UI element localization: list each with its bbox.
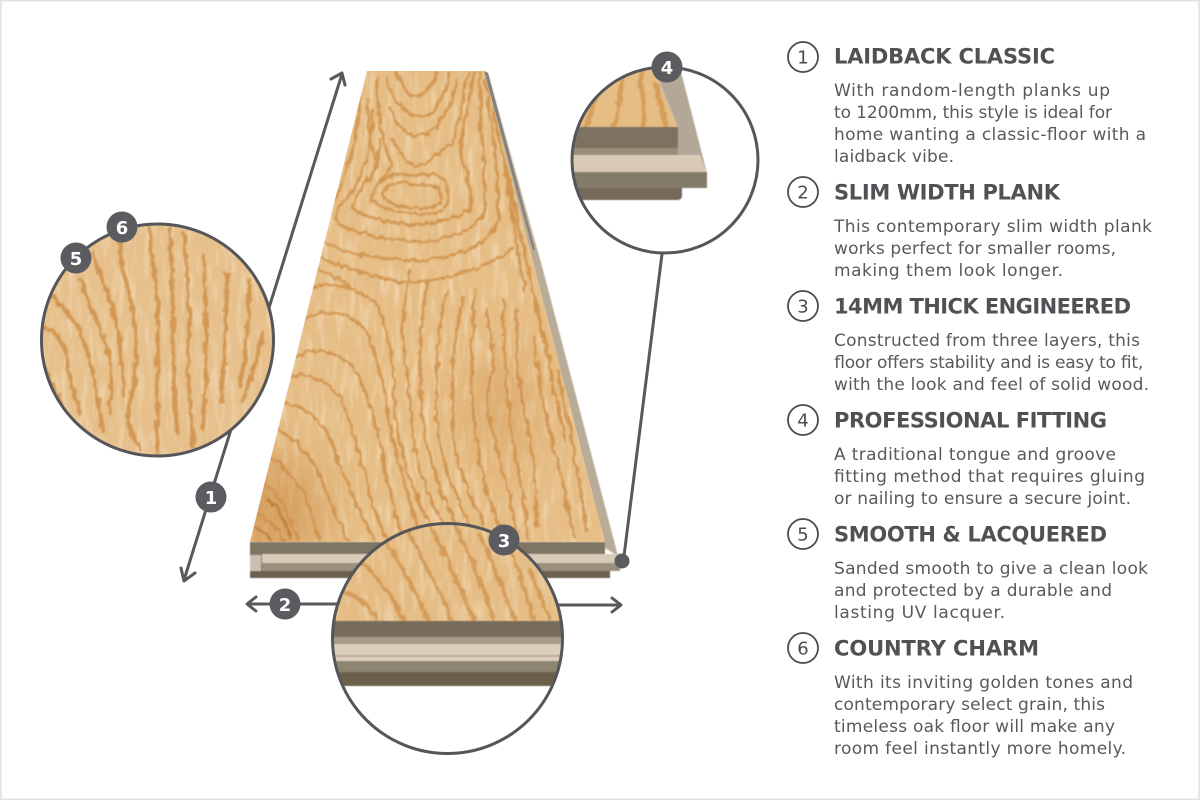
outer rings xyxy=(352,72,474,224)
feature 2: slim width plank xyxy=(788,177,1152,281)
badge 6 xyxy=(106,212,138,242)
feature 1: laidback classic: to 1200mm, this style is ideal for xyxy=(834,103,1112,123)
feature 6: country charm: With its inviting golden tones and xyxy=(834,673,1133,693)
badge 2: 2 xyxy=(279,595,291,616)
feature 5: smooth and lacquered: 5 xyxy=(797,524,809,546)
feature 6: country charm: COUNTRY CHARM xyxy=(834,636,1039,660)
feature 5: smooth and lacquered: Sanded smooth to give a clean look xyxy=(834,559,1148,579)
badge 4 xyxy=(652,52,682,82)
magnifier: grain detail xyxy=(40,220,276,460)
arrow: plank length xyxy=(181,73,345,581)
feature 4: professional fitting: 4 xyxy=(797,410,809,432)
plank illustration xyxy=(205,60,620,578)
plank side edge xyxy=(484,71,618,556)
feature 1: laidback classic: 1 xyxy=(797,48,809,68)
feature 1: laidback classic: laidback vibe. xyxy=(834,147,954,167)
lower left arcs xyxy=(312,282,432,524)
plank front layers xyxy=(250,542,620,578)
central loop xyxy=(382,182,441,208)
feature 6: country charm: timeless oak floor will make any xyxy=(834,717,1115,737)
feature 1: laidback classic: home wanting a classic-floor with a xyxy=(834,125,1146,145)
feature 2: slim width plank: 2 xyxy=(797,182,809,204)
feature 5: smooth and lacquered xyxy=(788,519,1148,623)
badge 4: 4 xyxy=(661,58,673,79)
feature 1: laidback classic: With random-length planks up xyxy=(834,81,1110,101)
badge 3: 3 xyxy=(498,531,510,552)
badge 2 xyxy=(270,588,300,620)
magnifier outline xyxy=(572,67,758,253)
feature 3: 14mm thick engineered: with the look and feel of solid wood. xyxy=(834,375,1149,395)
feature 4: professional fitting: A traditional tongue and groove xyxy=(834,445,1116,465)
magnifier outline xyxy=(42,224,274,456)
connector dot xyxy=(614,554,630,568)
badge 3 xyxy=(488,524,520,556)
upright grain xyxy=(400,268,444,522)
magnifier outline xyxy=(332,524,562,754)
plank top face with grain xyxy=(250,71,605,542)
badge 1 xyxy=(196,482,226,512)
badge 1: 1 xyxy=(205,488,217,509)
arrow: plank width xyxy=(247,597,621,612)
feature 5: smooth and lacquered: SMOOTH & LACQUERED xyxy=(834,522,1107,546)
magnifier: tongue and groove detail xyxy=(560,60,758,253)
feature 3: 14mm thick engineered: floor offers stability and is easy to fit, xyxy=(834,353,1143,373)
badge 5: 5 xyxy=(70,249,82,270)
feature 4: professional fitting xyxy=(788,405,1145,509)
feature 3: 14mm thick engineered: 3 xyxy=(797,296,809,318)
feature 2: slim width plank: This contemporary slim width plank xyxy=(833,217,1152,237)
feature 5: smooth and lacquered: lasting UV lacquer. xyxy=(834,603,1005,623)
feature 1: laidback classic xyxy=(788,42,1146,167)
feature 2: slim width plank: works perfect for smaller rooms, xyxy=(834,239,1116,259)
badge 5 xyxy=(60,242,92,274)
connector line to detail 4 xyxy=(624,254,662,556)
feature 6: country charm: 6 xyxy=(797,638,809,660)
feature 3: 14mm thick engineered: Constructed from three layers, this xyxy=(834,331,1140,351)
feature 4: professional fitting: fitting method that requires gluing xyxy=(834,467,1145,487)
feature 3: 14mm thick engineered: 14MM THICK ENGINEERED xyxy=(834,294,1131,318)
feature 4: professional fitting: PROFESSIONAL FITTING xyxy=(834,408,1107,432)
feature 6: country charm xyxy=(788,633,1133,759)
feature 6: country charm: room feel instantly more homely. xyxy=(834,739,1126,759)
feature 3: 14mm thick engineered xyxy=(788,291,1149,395)
feature 4: professional fitting: or nailing to ensure a secure joint. xyxy=(834,489,1131,509)
feature 2: slim width plank: SLIM WIDTH PLANK xyxy=(834,180,1061,204)
feature 6: country charm: contemporary select grain, this xyxy=(834,695,1105,715)
badge 6: 6 xyxy=(116,218,128,239)
feature 5: smooth and lacquered: and protected by a durable and xyxy=(834,581,1112,601)
feature 2: slim width plank: making them look longer. xyxy=(834,261,1063,281)
feature 1: laidback classic: LAIDBACK CLASSIC xyxy=(834,44,1055,68)
magnifier: thickness detail xyxy=(330,520,566,754)
cathedral upper xyxy=(397,72,438,97)
